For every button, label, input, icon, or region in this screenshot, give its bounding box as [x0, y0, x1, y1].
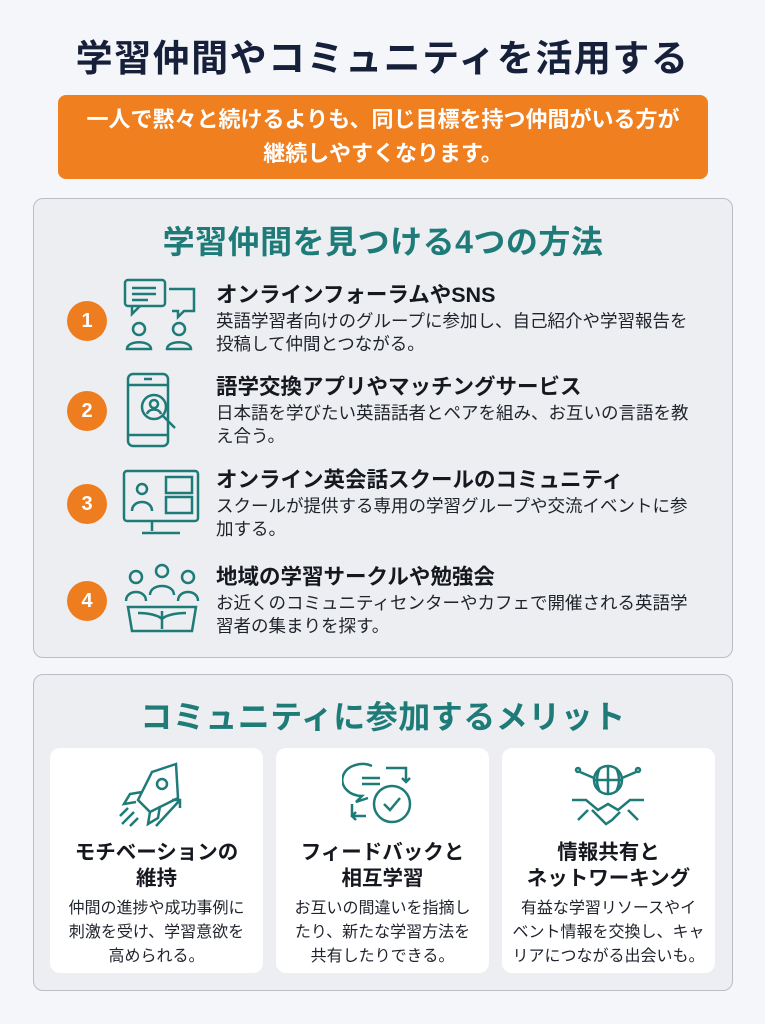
card: networking: 情報共有と: [557, 841, 660, 864]
number 3: [67, 484, 107, 524]
banner: [58, 95, 708, 179]
panel: methods: [33, 198, 733, 658]
item 4: お近くのコミュニティセンターやカフェで開催される英語学: [216, 593, 687, 613]
icon: globe handshake: [572, 764, 644, 826]
heading: benefits: コミュニティに参加するメリット: [140, 699, 626, 735]
card: networking: [502, 748, 715, 973]
item 2: 日本語を学びたい英語話者とペアを組み、お互いの言語を教: [216, 403, 688, 423]
card: networking: ベント情報を交換し、キャ: [512, 924, 704, 941]
icon: chat people: [124, 278, 196, 350]
banner: 一人で黙々と続けるよりも、同じ目標を持つ仲間がいる方が: [87, 107, 679, 132]
item 4: 地域の学習サークルや勉強会: [216, 565, 495, 589]
card: motivation: 仲間の進捗や成功事例に: [68, 900, 244, 917]
card: feedback: [276, 748, 489, 973]
heading: methods: 学習仲間を見つける4つの方法: [163, 224, 603, 260]
item 3: オンライン英会話スクールのコミュニティ: [216, 468, 623, 492]
number 1: [67, 301, 107, 341]
item 2: え合う。: [216, 426, 285, 446]
icon: rocket: [119, 762, 182, 827]
number 4: [67, 581, 107, 621]
item 1: 英語学習者向けのグループに参加し、自己紹介や学習報告を: [216, 311, 687, 331]
item 4: [216, 565, 687, 636]
item 4: 習者の集まりを探す。: [216, 616, 389, 636]
number 3: 3: [81, 493, 93, 515]
icon: study circle: [124, 564, 200, 632]
item 2: 語学交換アプリやマッチングサービス: [216, 375, 582, 399]
number 2: 2: [81, 400, 93, 422]
icon: chat check: [342, 762, 412, 824]
number 2: [67, 391, 107, 431]
item 1: オンラインフォーラムやSNS: [216, 283, 495, 307]
item 3: 加する。: [216, 519, 286, 539]
card: networking: リアにつながる出会いも。: [512, 948, 704, 965]
card: feedback: フィードバックと: [301, 841, 464, 864]
card: networking: 有益な学習リソースやイ: [521, 900, 696, 917]
item 3: [216, 468, 687, 539]
banner: 継続しやすくなります。: [263, 141, 503, 166]
item 1: 投稿して仲間とつながる。: [216, 334, 425, 354]
icon: monitor video: [122, 470, 200, 534]
item 1: [216, 283, 687, 354]
card: motivation: 維持: [136, 867, 177, 890]
number 1: 1: [81, 310, 93, 332]
panel: benefits: [33, 674, 733, 991]
title: 学習仲間やコミュニティを活用する: [76, 38, 689, 79]
icon: phone search: [126, 372, 176, 448]
card: networking: ネットワーキング: [527, 867, 690, 890]
number 4: 4: [81, 590, 93, 612]
item 2: [216, 375, 688, 446]
card: feedback: 共有したりできる。: [311, 948, 454, 965]
card: feedback: たり、新たな学習方法を: [295, 924, 470, 941]
card: feedback: 相互学習: [342, 867, 424, 890]
card: feedback: お互いの間違いを指摘し: [294, 900, 470, 917]
card: motivation: 高められる。: [108, 948, 204, 965]
card: motivation: [50, 748, 263, 973]
card: motivation: モチベーションの: [75, 841, 238, 864]
card: motivation: 刺激を受け、学習意欲を: [69, 924, 244, 941]
item 3: スクールが提供する専用の学習グループや交流イベントに参: [216, 496, 687, 516]
